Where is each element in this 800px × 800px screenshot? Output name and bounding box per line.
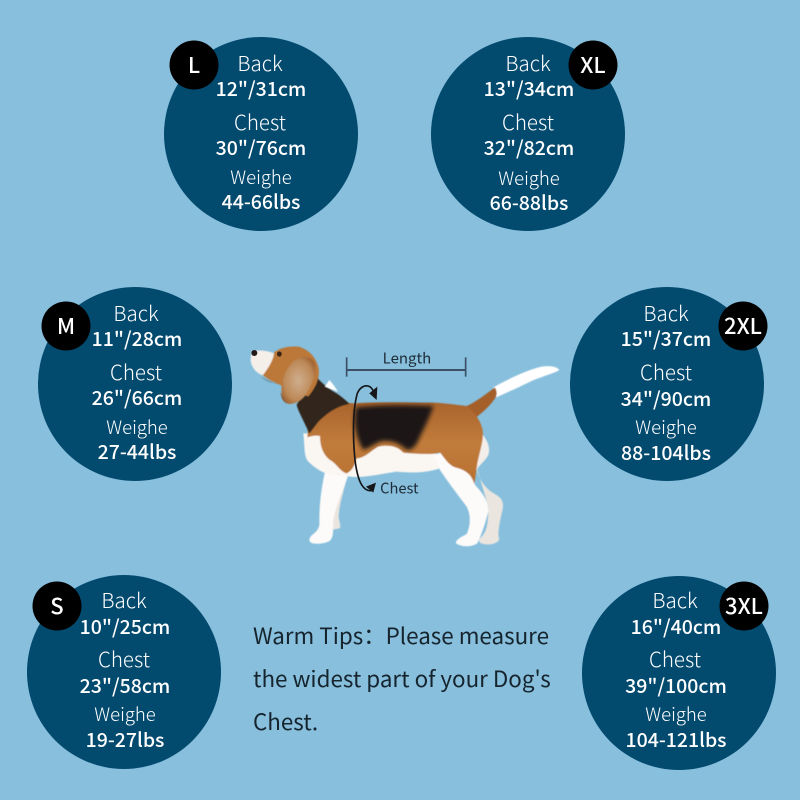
- size card: S: 10"/25cm: [80, 611, 170, 640]
- size card: M: [38, 287, 232, 481]
- tan coat: [307, 402, 483, 484]
- length label: Length: [383, 347, 431, 368]
- eye: [277, 351, 282, 357]
- size card: L: Weighe: [230, 164, 292, 190]
- warm tips text: [253, 619, 551, 737]
- size card: M: 27-44lbs: [98, 436, 176, 465]
- size card: L: 30"/76cm: [216, 132, 306, 161]
- size card: 3XL: 39"/100cm: [625, 670, 727, 699]
- size card: S: 23"/58cm: [80, 670, 170, 699]
- black saddle: [355, 405, 433, 450]
- warm tips text: the widest part of your Dog's: [253, 662, 551, 694]
- chest and belly: [303, 433, 443, 477]
- size card: 3XL: [582, 576, 776, 770]
- size card: 2XL: [570, 287, 768, 481]
- warm tips text: Chest.: [253, 705, 318, 737]
- size card: 2XL: Weighe: [635, 414, 697, 440]
- nose: [251, 350, 257, 356]
- size card: XL: Weighe: [498, 165, 560, 191]
- mouth shadow: [260, 376, 280, 384]
- tail: [493, 366, 559, 397]
- size card: 3XL: 3XL: [725, 589, 763, 621]
- size card: XL: Back: [505, 47, 551, 77]
- size card: L: [164, 37, 358, 231]
- size card: 2XL: 88-104lbs: [621, 437, 711, 466]
- size card: XL: XL: [580, 48, 606, 80]
- size card: XL: 66-88lbs: [490, 187, 568, 216]
- warm tips text: Warm Tips：Please measure: [253, 619, 549, 651]
- size card: L: Back: [237, 47, 283, 77]
- chest label: Chest: [380, 478, 419, 499]
- neck white flash: [325, 380, 338, 392]
- size card: 3XL: Chest: [649, 643, 701, 673]
- size card: S: Weighe: [94, 701, 156, 727]
- near front leg: [309, 472, 348, 544]
- size card: 2XL: 2XL: [724, 309, 762, 341]
- size card: S: S: [50, 589, 64, 621]
- far legs: [475, 462, 503, 545]
- chest measuring arrow: [353, 386, 377, 493]
- rump: [475, 432, 489, 473]
- size card: S: Chest: [98, 643, 150, 673]
- size card: 3XL: Back: [652, 584, 698, 614]
- size card: 2XL: 34"/90cm: [621, 383, 711, 412]
- size card: L: 12"/31cm: [216, 73, 306, 102]
- size card: XL: Chest: [502, 106, 554, 136]
- size card: S: [27, 575, 221, 769]
- size card: M: Weighe: [106, 414, 168, 440]
- size card: L: Chest: [234, 106, 286, 136]
- size card: XL: [431, 37, 625, 231]
- size card: L: L: [188, 48, 200, 80]
- dark neck: [297, 372, 349, 433]
- dog photo shapes: [303, 366, 559, 546]
- dog illustration with measurement marks: [251, 347, 559, 546]
- size card: XL: 32"/82cm: [484, 132, 574, 161]
- size card: 2XL: Back: [643, 297, 689, 327]
- muzzle: [251, 350, 274, 375]
- size card: 2XL: Chest: [640, 356, 692, 386]
- near hind leg: [433, 452, 488, 546]
- size card: 3XL: Weighe: [645, 701, 707, 727]
- size card: 2XL: 15"/37cm: [621, 323, 711, 352]
- size card: M: Chest: [110, 356, 162, 386]
- size card: M: M: [57, 309, 75, 341]
- size card: L: 44-66lbs: [222, 186, 300, 215]
- size card: S: 19-27lbs: [86, 724, 164, 753]
- head: [261, 347, 319, 397]
- size card: S: Back: [101, 584, 147, 614]
- size card: XL: 13"/34cm: [484, 73, 574, 102]
- ear: [281, 357, 315, 404]
- length bar: [347, 357, 466, 377]
- size card: M: 11"/28cm: [92, 323, 182, 352]
- size card: M: Back: [113, 297, 159, 327]
- size card: M: 26"/66cm: [92, 382, 182, 411]
- size card: 3XL: 16"/40cm: [631, 611, 721, 640]
- size card: 3XL: 104-121lbs: [625, 724, 727, 753]
